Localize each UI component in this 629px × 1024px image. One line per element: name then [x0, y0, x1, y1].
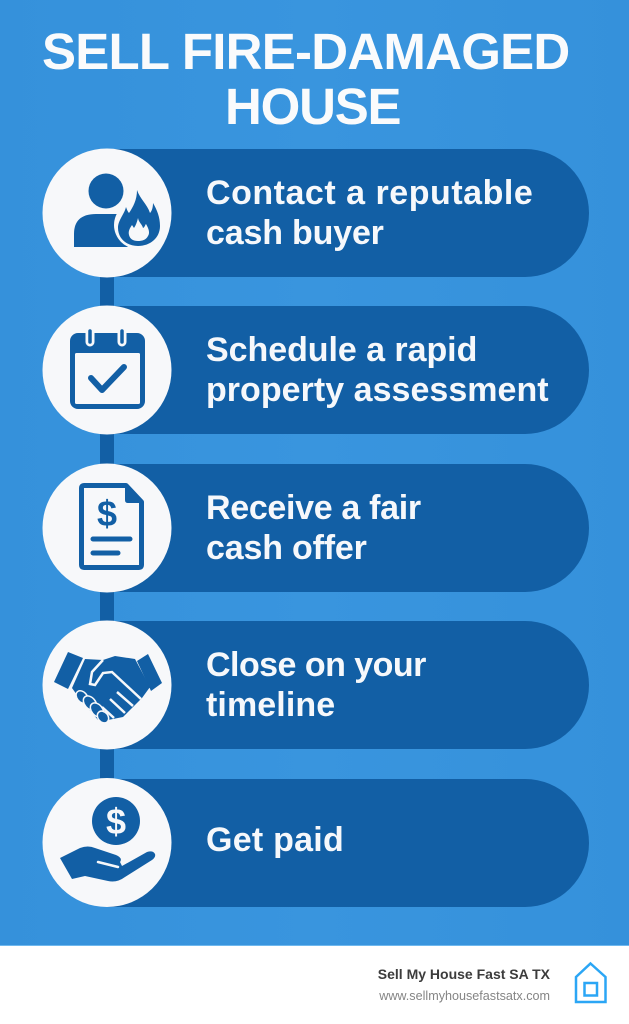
icon: offer document: [42, 464, 172, 592]
title: HOUSE: [225, 78, 400, 135]
step 5 text: Get paid: [206, 821, 344, 859]
step 4 text: Close on your: [206, 646, 426, 684]
step 2 pill: [107, 306, 589, 434]
footer company name: Sell My House Fast SA TX: [378, 966, 550, 982]
step 4 text: [206, 646, 426, 724]
step 5 pill: [107, 779, 589, 907]
icon: footer house logo: [574, 962, 607, 1004]
icon: person with flame: [42, 148, 172, 278]
step 4 pill: [107, 621, 589, 749]
icon: handshake: [42, 620, 172, 750]
step 2 text: Schedule a rapid: [206, 331, 477, 369]
footer bar: [0, 946, 629, 1024]
step 3 pill: [107, 464, 589, 592]
step 1 text: cash buyer: [206, 214, 384, 252]
step 3 text: Receive a fair: [206, 489, 421, 527]
step 2 text: property assessment: [206, 371, 549, 409]
connector line: [100, 270, 114, 840]
step 3 text: [206, 489, 421, 567]
step 4 text: timeline: [206, 686, 335, 724]
icon: offer document: $: [97, 493, 117, 534]
icon: hand with coin: $: [106, 801, 126, 842]
step 1 text: [206, 174, 533, 252]
step 2 text: [206, 331, 549, 409]
title: [42, 23, 569, 135]
footer website: www.sellmyhousefastsatx.com: [379, 989, 550, 1003]
step 3 text: cash offer: [206, 529, 367, 567]
icon: hand with coin: [42, 778, 172, 907]
title: SELL FIRE-DAMAGED: [42, 23, 569, 80]
step 1 pill: [107, 149, 589, 277]
icon: calendar with check: [42, 306, 172, 434]
step 1 text: Contact a reputable: [206, 174, 533, 212]
